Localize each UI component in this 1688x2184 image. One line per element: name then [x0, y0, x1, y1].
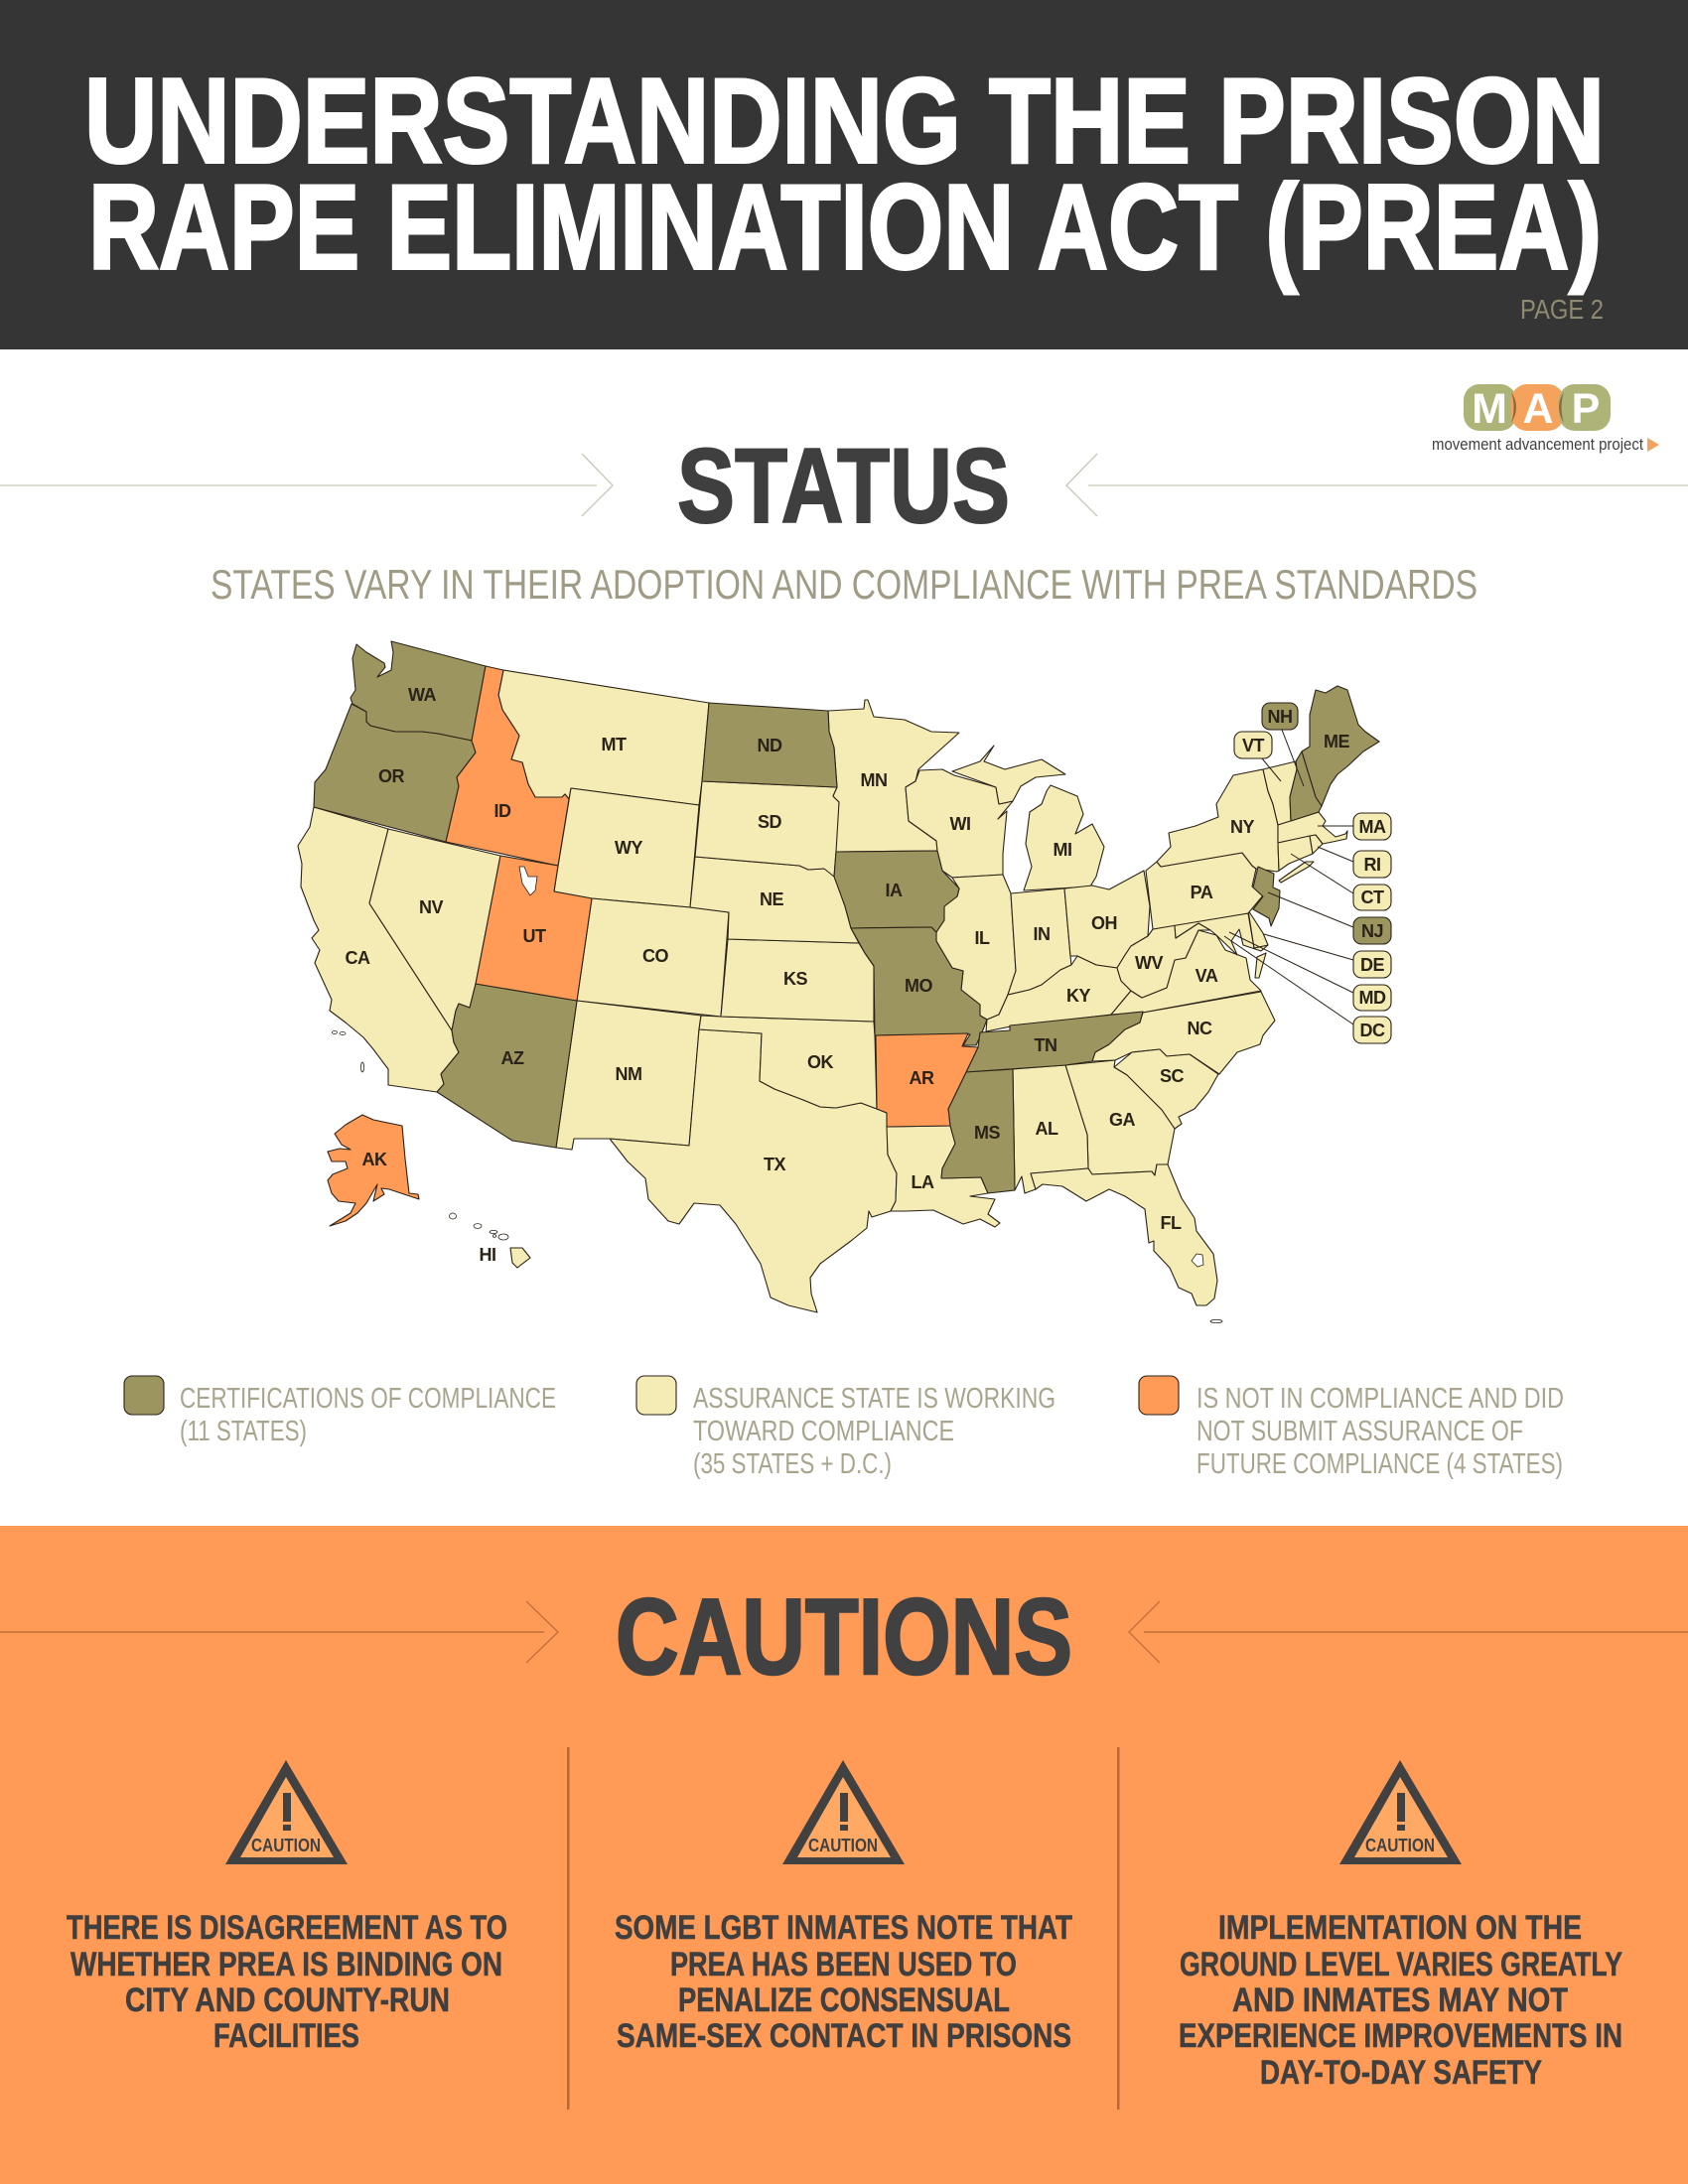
state: NY — [1157, 769, 1279, 872]
state labels: SD — [758, 812, 781, 832]
state labels: UT — [522, 926, 546, 946]
callout: CT: CT — [1360, 887, 1384, 907]
icon: caution triangle 2: CAUTION — [808, 1836, 878, 1855]
state: NE — [690, 857, 859, 943]
icon: caution triangle 3 — [1339, 1760, 1462, 1864]
state: KS — [721, 939, 874, 1022]
state: NC — [1092, 992, 1275, 1074]
state labels: SC — [1160, 1066, 1184, 1086]
state labels: VA — [1196, 966, 1218, 986]
state labels: WI — [949, 814, 971, 834]
callout: RI — [1353, 851, 1391, 878]
callout: DE — [1353, 951, 1391, 978]
divider right — [1117, 1747, 1120, 2110]
state: VA — [1111, 930, 1261, 1015]
callout leader lines — [1224, 730, 1353, 1024]
state labels: LA — [912, 1172, 934, 1192]
caution text 3 — [1179, 1909, 1622, 2092]
caution text 3: DAY-TO-DAY SAFETY — [1260, 2054, 1542, 2092]
callout: MA: MA — [1358, 817, 1386, 837]
callout: VT: VT — [1242, 736, 1264, 755]
page number: PAGE 2 — [1520, 294, 1604, 325]
lake: Okeechobee — [1192, 1254, 1203, 1267]
state labels: MI — [1053, 840, 1072, 860]
state: CA — [298, 807, 459, 1092]
state labels: OR — [378, 766, 405, 786]
state labels: ID — [494, 801, 511, 821]
state labels: CO — [642, 946, 668, 966]
state: WV — [1117, 923, 1210, 998]
caution text 2: SOME LGBT INMATES NOTE THAT — [615, 1909, 1072, 1947]
icon: caution triangle 2 — [782, 1760, 905, 1864]
state labels: MS — [974, 1123, 1000, 1143]
state labels: KY — [1066, 986, 1090, 1006]
arrow: status right — [1066, 454, 1688, 516]
caution text 1: FACILITIES — [213, 2017, 359, 2055]
caution text 1 — [67, 1909, 507, 2055]
legend: assurance state: (35 STATES + D.C.) — [693, 1448, 892, 1480]
caution text 2: PENALIZE CONSENSUAL — [678, 1981, 1010, 2019]
MAP logo: M — [1472, 385, 1507, 433]
state labels: NV — [419, 897, 443, 917]
state labels: MT — [602, 735, 627, 754]
divider left — [567, 1747, 570, 2110]
caution text 1: WHETHER PREA IS BINDING ON — [70, 1946, 502, 1983]
state labels: ND — [757, 736, 782, 755]
state labels: WY — [615, 838, 642, 858]
state: SC — [1114, 1049, 1218, 1129]
state labels: ME — [1324, 732, 1349, 751]
callout: MD — [1353, 985, 1391, 1011]
panel: cautions — [0, 1526, 1688, 2184]
state labels: TX — [764, 1155, 785, 1174]
legend: assurance state — [636, 1376, 1055, 1480]
state: IA — [834, 851, 959, 932]
state: IN — [1008, 888, 1071, 995]
state: LA — [887, 1126, 1000, 1227]
state: ND — [702, 703, 837, 787]
status heading: STATUS — [677, 426, 1010, 545]
legend: not in compliance: NOT SUBMIT ASSURANCE OF — [1196, 1416, 1523, 1447]
state: SD — [695, 781, 839, 877]
state: WY — [554, 788, 699, 907]
state: WI — [906, 769, 1013, 878]
state: UT — [476, 856, 592, 1001]
state labels: CA — [346, 948, 370, 968]
callout: VT — [1234, 732, 1272, 758]
state: GA — [1065, 1060, 1175, 1175]
MAP logo: movement advancement project — [1432, 435, 1643, 454]
state: AK — [328, 1115, 419, 1226]
caution text 2 — [615, 1909, 1072, 2055]
state labels: KS — [783, 969, 807, 989]
state: MN — [828, 700, 959, 852]
cautions heading: CAUTIONS — [616, 1576, 1072, 1698]
state: NH — [1290, 751, 1322, 821]
state labels: NC — [1188, 1019, 1212, 1038]
state: DE — [1248, 910, 1268, 948]
small islands — [332, 1030, 1222, 1323]
state: TX — [610, 1029, 897, 1312]
callout: RI: RI — [1364, 855, 1380, 875]
caution text 2: SAME-SEX CONTACT IN PRISONS — [617, 2017, 1071, 2055]
callout: NJ — [1353, 917, 1391, 944]
state: MI upper — [952, 746, 1065, 804]
arrow: status left — [0, 454, 613, 516]
legend: certifications of compliance: (11 STATES) — [180, 1416, 307, 1447]
state: NJ — [1253, 867, 1280, 926]
legend: not in compliance: FUTURE COMPLIANCE (4 STATES) — [1196, 1448, 1563, 1480]
state labels: FL — [1160, 1213, 1182, 1233]
state: IL — [936, 875, 1016, 1020]
state: VA eastern shore — [1255, 953, 1266, 978]
state: CO — [577, 898, 729, 1017]
state labels: MO — [905, 976, 932, 996]
state: VT — [1263, 761, 1297, 825]
icon: caution triangle 1: CAUTION — [251, 1836, 321, 1855]
state labels: AZ — [500, 1048, 524, 1068]
caution text 3: AND INMATES MAY NOT — [1232, 1981, 1568, 2019]
legend: certifications of compliance: CERTIFICATIONS OF COMPLIANCE — [180, 1383, 556, 1415]
state: RI — [1310, 835, 1323, 854]
icon: caution triangle 1 — [225, 1760, 348, 1864]
state labels: WA — [408, 685, 436, 705]
state labels: NM — [616, 1064, 641, 1084]
callout: MA — [1353, 813, 1391, 840]
state: MT — [498, 670, 709, 805]
state: MI lower — [1024, 785, 1104, 890]
legend: assurance state: TOWARD COMPLIANCE — [693, 1416, 954, 1447]
state labels: AR — [910, 1068, 934, 1088]
state: MA — [1278, 812, 1347, 844]
state labels: IN — [1033, 924, 1051, 944]
legend: not in compliance: IS NOT IN COMPLIANCE AND DID — [1196, 1383, 1564, 1415]
callout: NJ: NJ — [1361, 921, 1383, 941]
caution text 1: THERE IS DISAGREEMENT AS TO — [67, 1909, 507, 1947]
state labels: PA — [1191, 883, 1213, 902]
arrow: cautions right — [1129, 1601, 1688, 1663]
legend: assurance state: ASSURANCE STATE IS WORKING — [693, 1383, 1055, 1415]
state: OK — [699, 1016, 877, 1109]
state labels: WV — [1135, 953, 1163, 973]
MAP logo: A — [1522, 385, 1554, 433]
state: OR — [314, 704, 476, 842]
state labels: NE — [760, 889, 783, 909]
state labels: IL — [975, 928, 990, 948]
state: NV — [369, 829, 500, 1030]
state: KY — [986, 956, 1131, 1031]
legend: not in compliance — [1139, 1376, 1564, 1480]
MAP logo — [1432, 384, 1659, 454]
state: MS — [941, 1069, 1015, 1193]
callout: NH — [1262, 703, 1298, 730]
state labels: NY — [1230, 817, 1254, 837]
caution text 3: IMPLEMENTATION ON THE — [1218, 1909, 1582, 1947]
title — [84, 54, 1605, 294]
state: AZ — [437, 984, 577, 1148]
callout: DC — [1353, 1017, 1391, 1043]
state: TN — [966, 1012, 1143, 1072]
state: NM — [556, 1001, 701, 1150]
caution text 2: PREA HAS BEEN USED TO — [670, 1946, 1017, 1983]
state labels: OH — [1091, 913, 1117, 933]
state: ID — [446, 666, 569, 866]
state labels: AL — [1035, 1119, 1058, 1139]
state: OH — [1064, 871, 1150, 968]
state labels: OK — [807, 1052, 834, 1072]
state: AL — [1013, 1065, 1088, 1193]
callout: DC: DC — [1360, 1021, 1385, 1040]
callout: NH: NH — [1267, 707, 1293, 727]
state labels: MN — [860, 770, 888, 790]
state labels: IA — [886, 881, 903, 900]
arrow: cautions left — [0, 1601, 558, 1663]
state: AR — [876, 1033, 978, 1127]
state labels: TN — [1035, 1035, 1056, 1055]
state: FL — [1031, 1164, 1217, 1305]
state: HI big island — [510, 1248, 530, 1268]
state: MO — [851, 927, 987, 1045]
state: Long Island — [1279, 862, 1314, 883]
caution text 1: CITY AND COUNTY-RUN — [125, 1981, 450, 2019]
callout: CT — [1353, 885, 1391, 910]
state labels: HI — [479, 1245, 496, 1265]
state labels — [346, 685, 1349, 1265]
callout: DE: DE — [1360, 955, 1384, 975]
state: ME — [1302, 686, 1379, 806]
header banner — [0, 0, 1688, 349]
lake: Great Salt Lake — [519, 867, 537, 895]
MAP logo: P — [1572, 385, 1600, 433]
state: PA — [1146, 853, 1263, 929]
state: MD — [1175, 913, 1268, 955]
state labels: GA — [1109, 1110, 1136, 1130]
icon: caution triangle 3: CAUTION — [1365, 1836, 1435, 1855]
state: WA — [351, 641, 486, 741]
legend: certifications of compliance — [124, 1376, 556, 1447]
state labels: AK — [361, 1150, 387, 1169]
callout: MD: MD — [1358, 988, 1386, 1008]
state: CT — [1278, 836, 1313, 871]
US map — [298, 641, 1391, 1323]
